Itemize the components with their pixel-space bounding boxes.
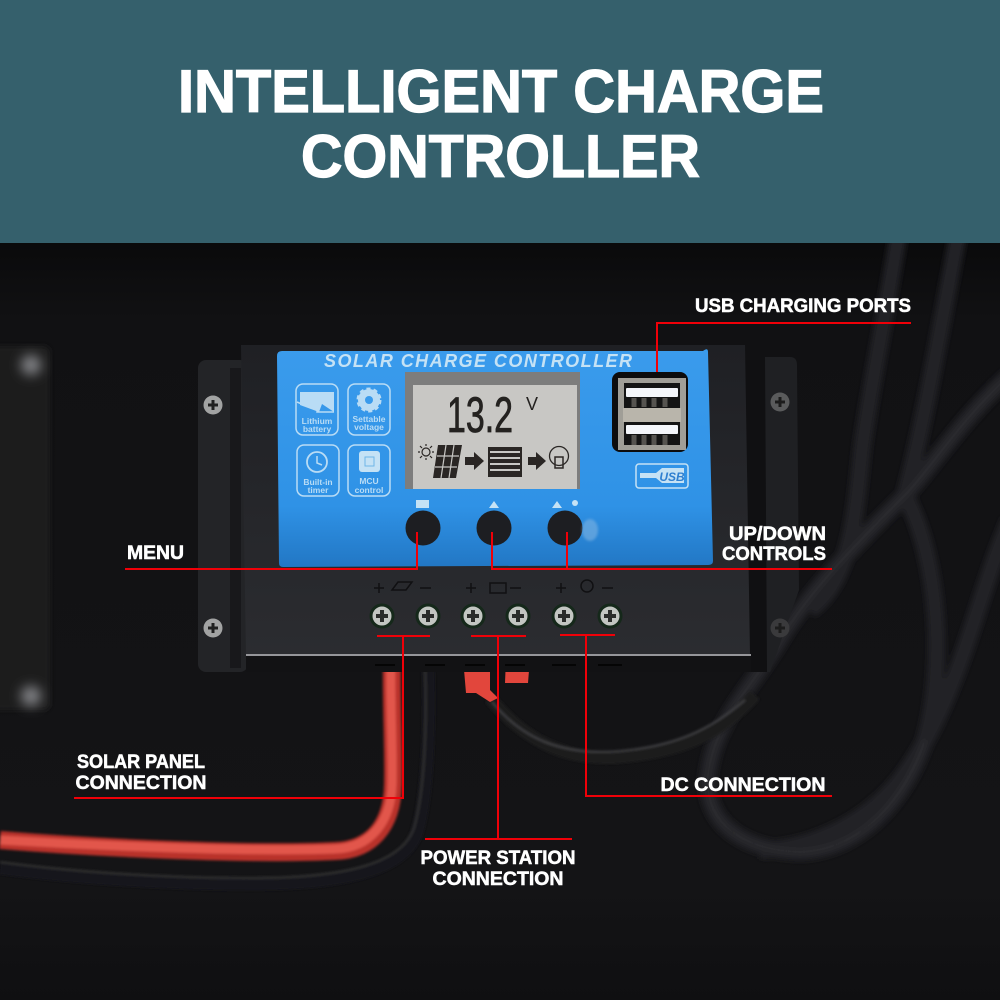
icon: settable voltage [348,384,390,435]
icon: settable voltage: Settable [352,414,386,424]
icon: lithium battery: battery [303,424,331,434]
header band [0,0,1000,243]
LCD display: V [526,394,538,414]
bulb glyph [550,446,568,466]
black solar cable [0,660,429,884]
USB port [612,372,688,452]
battery glyph [488,447,522,477]
title [178,58,824,190]
callout: usb charging ports: USB CHARGING PORTS [695,296,911,317]
callout: solar panel connection [74,636,430,798]
callout: dc connection [560,635,832,796]
solar panel glyph [433,445,462,478]
USB logo [636,464,688,488]
icon: built-in timer: Built-in [303,477,333,487]
callout: up/down controls: CONTROLS [722,544,826,565]
buttons [406,510,582,546]
arrow [528,452,546,470]
callout: power station connection: CONNECTION [432,869,564,890]
callout: power station connection: POWER STATION [420,848,576,869]
sun glyph [418,444,434,460]
callout: up/down controls [492,524,832,569]
controller body [241,345,751,672]
icon: built-in timer [297,445,339,496]
left bracket [198,360,248,672]
terminal symbols [374,580,613,593]
button symbols [416,500,578,508]
blue control panel [277,349,713,567]
LCD display [405,372,580,489]
icon: built-in timer: timer [308,485,329,495]
callout: solar panel connection: CONNECTION [76,773,206,794]
photo background [0,243,1000,1000]
title: CONTROLLER [301,123,700,190]
title: INTELLIGENT CHARGE [178,58,824,125]
button scuff [582,519,598,541]
gap behind right bracket [745,360,767,672]
callout: usb charging ports [657,296,911,372]
callout: dc connection: DC CONNECTION [660,775,826,796]
icon: MCU control [348,445,390,496]
callout: menu [125,532,417,569]
red connector sleeves [463,658,530,702]
callout: up/down controls: UP/DOWN [729,524,826,545]
callout: menu: MENU [127,543,184,564]
arrow [465,452,484,470]
right bracket [765,357,799,672]
icon: lithium battery [296,384,338,435]
black power station cable [490,695,755,758]
callout: power station connection [420,636,576,890]
icon: MCU control: control [355,485,383,495]
terminal screws [371,605,621,627]
terminal blocks [371,580,621,627]
callout: solar panel connection: SOLAR PANEL [77,752,205,773]
coiled black cables [708,225,1000,852]
icon: settable voltage: voltage [354,422,384,432]
left mounting block [0,346,50,710]
icon: MCU control: MCU [359,476,379,486]
LCD reading: 13.2 [447,387,513,443]
icon: lithium battery: Lithium [302,416,333,426]
red solar cable [0,660,393,852]
panel title: SOLAR CHARGE CONTROLLER [324,351,632,371]
USB logo: USB [659,470,685,484]
